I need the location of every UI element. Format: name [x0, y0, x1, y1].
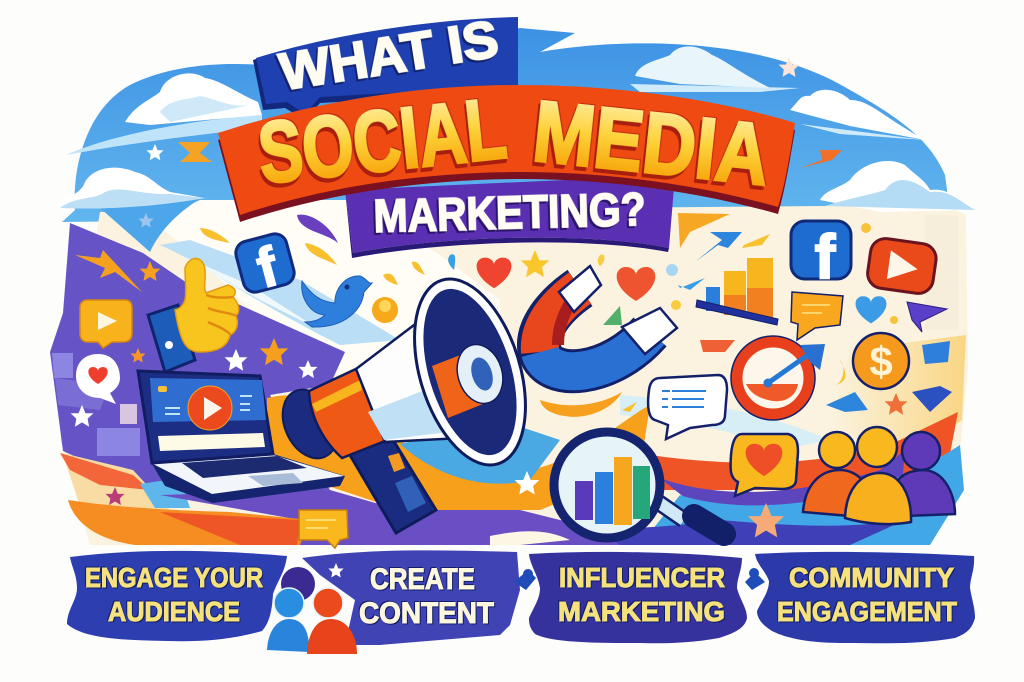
sky streaks: [66, 115, 262, 155]
confetti top-right: [598, 213, 898, 352]
icon: thumbs up: [148, 258, 239, 372]
title text: social: SOCIAL: [254, 80, 511, 202]
skill banner: influencer marketing: [529, 552, 747, 643]
confetti top-left: [200, 215, 455, 323]
skill banner: engage your audience: ENGAGE YOUR: [85, 562, 263, 593]
play button: [188, 386, 232, 430]
icon: video bubble: [80, 300, 132, 348]
icon: target with dart: [731, 336, 825, 420]
megaphone collar: [309, 368, 385, 458]
cloud far-right: [820, 161, 975, 212]
icon: twitter bird: [302, 276, 372, 327]
title: social media banner: [218, 80, 795, 222]
skill banner: create content: CREATE: [370, 563, 475, 596]
illustration scene background: [50, 28, 968, 545]
title: what is banner: [253, 10, 518, 120]
cream ground: [60, 205, 968, 545]
bottom-left warm bands: [62, 453, 230, 520]
cloud top-left: [125, 73, 262, 125]
connector arrow right: [745, 568, 765, 590]
icon: orange comment bubble: [791, 292, 843, 340]
bottom-left orange: [68, 500, 310, 545]
skill banner: community engagement: COMMUNITY: [789, 562, 954, 593]
icon: small people: [267, 567, 357, 654]
icon: yellow chat bubble: [299, 510, 348, 548]
skill banner: influencer marketing: MARKETING: [558, 596, 725, 627]
skill banner: engage your audience: [67, 551, 287, 641]
title text: what is: WHAT IS: [276, 10, 502, 102]
right warm wash: [830, 335, 966, 470]
title text: marketing: MARKETING?: [373, 183, 646, 242]
icon: dollar coin: $: [869, 338, 893, 385]
hearts: [477, 258, 886, 323]
bottom purple band: [160, 490, 620, 545]
megaphone back cap: [272, 381, 348, 467]
connector arrow left: [514, 569, 536, 590]
cloud mid-left: [58, 168, 205, 208]
icon: megaphone: [272, 266, 546, 533]
skill banner: engage your audience: AUDIENCE: [108, 596, 240, 627]
icon: community people: [803, 427, 955, 524]
icon: facebook right: f: [815, 223, 836, 292]
icon: youtube play: [866, 237, 938, 295]
skill banner: community engagement: [755, 552, 975, 643]
megaphone handle: [347, 440, 436, 533]
scene stars: [71, 250, 907, 537]
icon: facebook right: [791, 221, 851, 292]
skill banner: create content: CONTENT: [359, 597, 494, 630]
icon: orange swoosh: [540, 392, 637, 417]
icon: laptop: [138, 371, 345, 503]
pale blue streaks: [160, 240, 400, 345]
skill banner: influencer marketing: INFLUENCER: [559, 562, 725, 593]
icon: dollar coin: [853, 333, 909, 389]
megaphone horn body: [356, 322, 462, 442]
right side shapes: [826, 341, 952, 412]
icon: magnifier with chart: [554, 432, 724, 538]
icon: heart chat bubble: [731, 434, 798, 496]
title text: media: MEDIA: [529, 83, 774, 204]
cloud top-right: [635, 46, 770, 88]
icon: facebook left: [233, 230, 299, 305]
skill banner: create content: [302, 550, 520, 645]
icon: purple paper plane: [907, 302, 947, 332]
cloud right: [790, 90, 925, 140]
icon: orange arrow: [75, 250, 160, 292]
sky stars: [146, 144, 164, 160]
orange swirl: [267, 395, 650, 510]
megaphone center ring: [450, 339, 510, 409]
icon: facebook left: f: [250, 234, 285, 300]
icon: magnet: [539, 266, 677, 371]
sky panel: [62, 28, 950, 222]
clouds: [58, 46, 975, 227]
title: marketing banner: [345, 175, 675, 258]
icon: bar chart: [696, 258, 778, 325]
left purple: [50, 223, 345, 500]
skill banner: community engagement: ENGAGEMENT: [777, 596, 957, 627]
megaphone mouth: [394, 266, 546, 478]
icon: white speech bubble: [648, 375, 727, 439]
icon: heart bubble: [76, 354, 120, 404]
red and blue right bands: [650, 412, 958, 490]
